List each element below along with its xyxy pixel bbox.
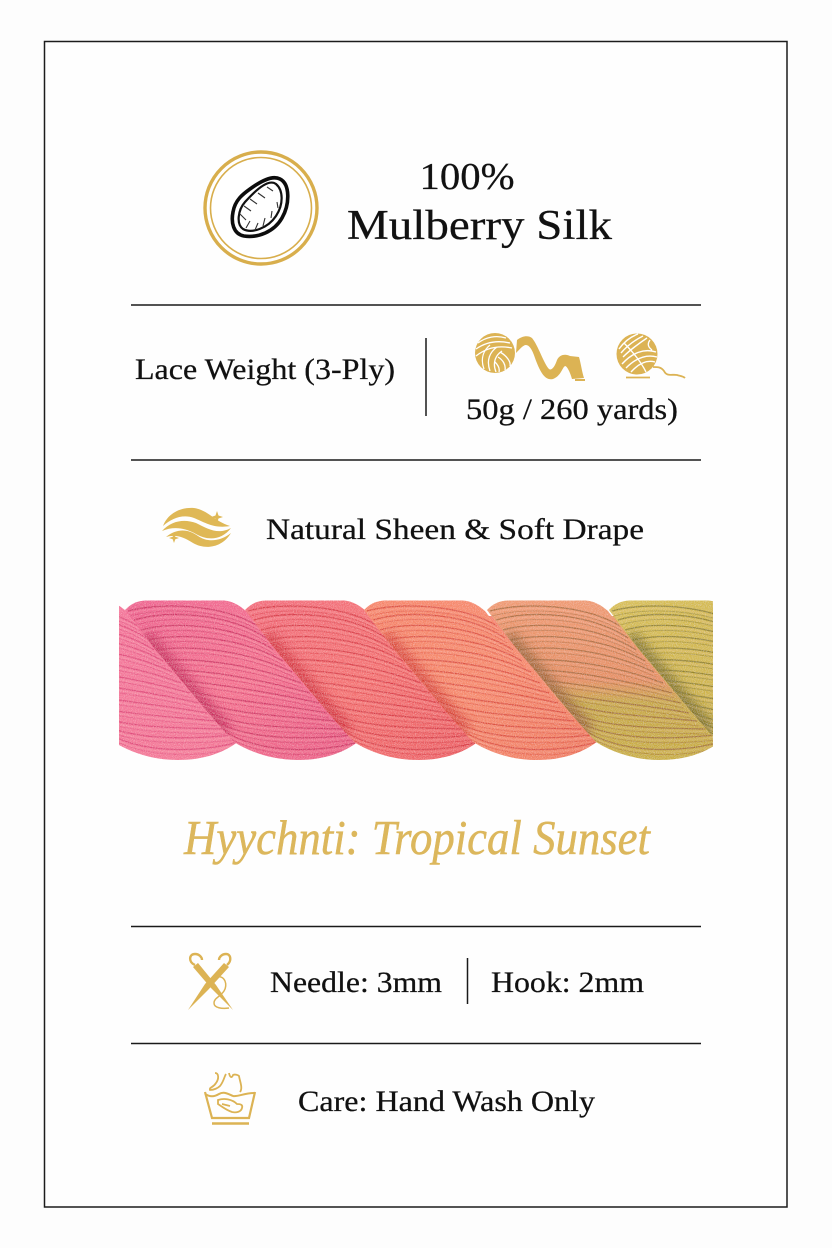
- heading: fibre content: 100%: [420, 156, 514, 198]
- skein strand: olive gold: [609, 600, 713, 736]
- skein strand: coral red: [245, 600, 480, 760]
- heading: fibre content: Mulberry Silk: [347, 203, 612, 249]
- heading: fibre content: [347, 156, 612, 249]
- icon: hand wash tub: [205, 1073, 255, 1124]
- text: yarn weight: Lace Weight (3-Ply): [135, 353, 395, 386]
- text: sheen and drape: Natural Sheen & Soft Drape: [266, 513, 644, 546]
- skein strand: coral: [364, 600, 599, 760]
- text: needle size: Needle: 3mm: [270, 966, 442, 999]
- icon: yarn ball with ribbon: [475, 333, 585, 380]
- icon: yarn ball with thread: [616, 334, 685, 378]
- skein strand: rose: [125, 600, 360, 760]
- yarn skein image: [119, 600, 713, 760]
- icon: sheen waves with sparkles: [162, 508, 231, 547]
- colourway title: Hyychnti: Tropical Sunset: [183, 810, 651, 865]
- icon: crossed needle and hook: [188, 954, 233, 1010]
- skein strand: pink: [119, 606, 236, 760]
- skein strand: peach to olive: [487, 600, 722, 760]
- text: hook size: Hook: 2mm: [491, 966, 644, 999]
- text: ball weight and yardage: 50g / 260 yards): [466, 393, 678, 426]
- icon: silk cocoon badge: [205, 152, 317, 264]
- text: care instructions: Care: Hand Wash Only: [298, 1085, 595, 1118]
- skein underlay: [489, 616, 692, 720]
